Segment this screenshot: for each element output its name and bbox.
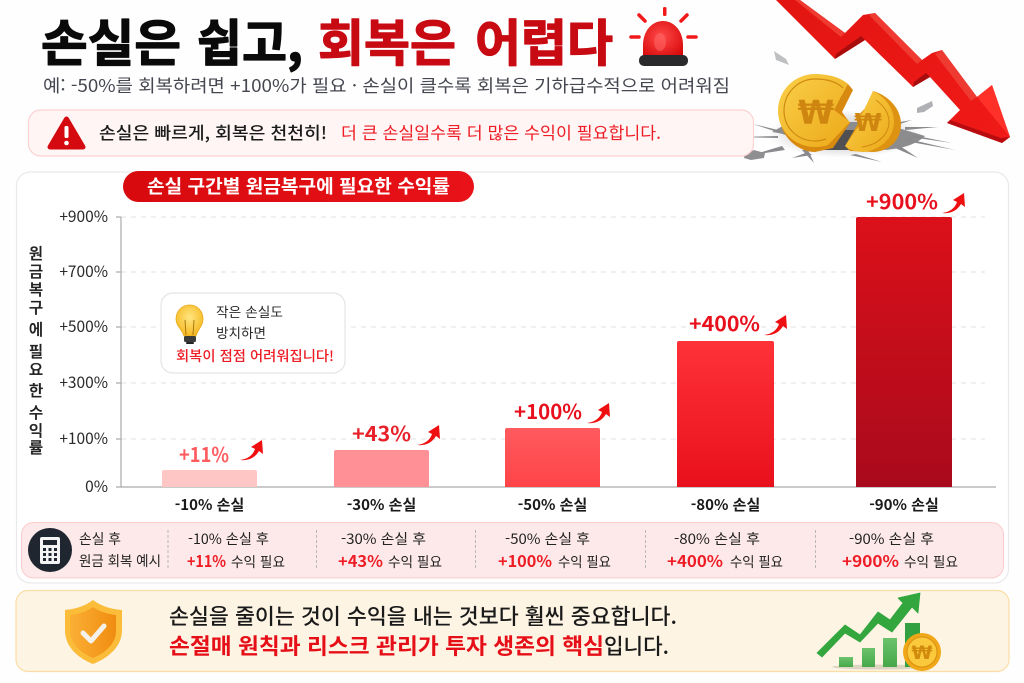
- recovery example strip: 원금 회복 예시: [79, 551, 161, 571]
- callout: small loss tip: 회복이 점점 어려워집니다!: [176, 346, 334, 366]
- bar: -10%: -10% 손실: [175, 494, 244, 515]
- bar: -30%: [334, 418, 440, 515]
- example: -90%: -90% 손실 후: [849, 529, 934, 549]
- chart heading pill: 손실 구간별 원금복구에 필요한 수익률: [147, 173, 450, 199]
- y axis labels and grid: +900%: [59, 205, 108, 227]
- example: -30%: [338, 529, 442, 572]
- y axis labels and grid: +300%: [59, 371, 108, 393]
- example: -90%: [842, 529, 958, 572]
- example: -90%: 수익 필요: [904, 552, 958, 572]
- example: -50%: +100%: [498, 548, 552, 572]
- example: -10%: +11%: [187, 548, 226, 572]
- bar: -50%: [505, 396, 610, 515]
- panel: bottom takeaway: [16, 590, 1009, 672]
- title: 어렵다: [475, 4, 613, 76]
- title: [41, 4, 613, 76]
- icon: calculator: [28, 528, 72, 572]
- example: -30%: 수익 필요: [388, 552, 442, 572]
- y axis title: 수: [29, 401, 43, 423]
- y axis labels and grid: +100%: [59, 427, 108, 449]
- callout: small loss tip: 방치하면: [216, 322, 266, 342]
- panel: bottom takeaway: 손실을 줄이는 것이 수익을 내는 것보다 훨씬 중요합니다.: [169, 600, 677, 631]
- bar: -50%: +100%: [514, 396, 582, 425]
- bar: -80%: [677, 308, 787, 515]
- bar: -10%: +11%: [179, 439, 229, 468]
- example: -80%: [667, 529, 783, 572]
- y axis title: 률: [29, 436, 43, 458]
- icon: shield: [65, 600, 122, 664]
- example: -80%: -80% 손실 후: [674, 529, 760, 549]
- falling red arrow: [776, 0, 1010, 143]
- icon: growth chart with coin: ₩: [912, 642, 933, 664]
- title: 손실은: [41, 4, 181, 76]
- bar: -80%: -80% 손실: [691, 494, 760, 515]
- recovery example strip: 손실 후: [79, 529, 121, 549]
- icon: light bulb: [176, 305, 203, 344]
- bar: -50%: -50% 손실: [518, 494, 587, 515]
- example: -50%: -50% 손실 후: [505, 529, 590, 549]
- y axis labels and grid: [59, 205, 996, 497]
- y axis title: 원: [29, 242, 43, 264]
- bar: -90%: +900%: [866, 186, 938, 215]
- bar: -90%: -90% 손실: [869, 494, 939, 515]
- broken coin right: [845, 91, 901, 152]
- example: -80%: 수익 필요: [730, 552, 783, 572]
- warning banner: 손실은 빠르게, 회복은 천천히!: [99, 119, 327, 144]
- example: -30%: +43%: [338, 548, 383, 572]
- cracked ground: [735, 51, 955, 163]
- broken coin right: ₩: [854, 108, 882, 137]
- panel: chart: [16, 171, 1008, 583]
- subtitle: 예: -50%를 회복하려면 +100%가 필요 · 손실이 클수록 회복은 기하급수적으로 어려워짐: [43, 73, 730, 98]
- example: -10%: -10% 손실 후: [188, 529, 269, 549]
- y axis title: 요: [29, 358, 43, 380]
- hero illustration: falling arrow and broken won coin: [735, 0, 1010, 163]
- bar: -30%: +43%: [352, 418, 411, 447]
- example: -50%: 수익 필요: [558, 552, 611, 572]
- broken coin left: [778, 74, 853, 152]
- example: -30%: -30% 손실 후: [341, 529, 426, 549]
- bar: -80%: +400%: [689, 308, 760, 337]
- y axis title: 에: [29, 318, 43, 340]
- example: -50%: [498, 529, 611, 572]
- example: -10%: 수익 필요: [231, 552, 285, 572]
- icon: siren: [631, 7, 696, 66]
- icon: growth chart with coin: [817, 593, 941, 671]
- y axis labels and grid: +500%: [59, 315, 108, 337]
- panel: bottom takeaway: 입니다.: [604, 630, 669, 661]
- y axis title: 필: [29, 340, 43, 362]
- panel: bottom takeaway: 손절매 원칙과 리스크 관리가 투자 생존의 핵심: [169, 629, 604, 661]
- title: 쉽고,: [197, 4, 303, 76]
- example: -90%: +900%: [842, 548, 899, 572]
- example: -10%: [187, 529, 285, 572]
- warning banner: 더 큰 손실일수록 더 많은 수익이 필요합니다.: [341, 119, 661, 144]
- y axis title: [29, 242, 43, 458]
- title: 회복은: [318, 4, 456, 76]
- y axis title: 복: [29, 278, 43, 300]
- recovery example strip: [22, 522, 1004, 578]
- y axis labels and grid: +700%: [59, 260, 108, 282]
- callout: small loss tip: 작은 손실도: [216, 301, 283, 321]
- bar: -90%: [856, 186, 965, 515]
- example: -80%: +400%: [667, 548, 723, 572]
- y axis title: 익: [29, 419, 43, 441]
- icon: warning triangle: [50, 119, 83, 147]
- y axis title: 한: [29, 379, 43, 401]
- callout: small loss tip: [161, 293, 345, 373]
- bar: -10%: [162, 439, 263, 515]
- y axis title: 금: [29, 260, 43, 282]
- bar: -30%: -30% 손실: [347, 494, 416, 515]
- y axis title: 구: [29, 296, 43, 318]
- warning banner: [28, 110, 754, 156]
- broken coin left: ₩: [798, 93, 834, 132]
- y axis labels and grid: 0%: [85, 475, 108, 497]
